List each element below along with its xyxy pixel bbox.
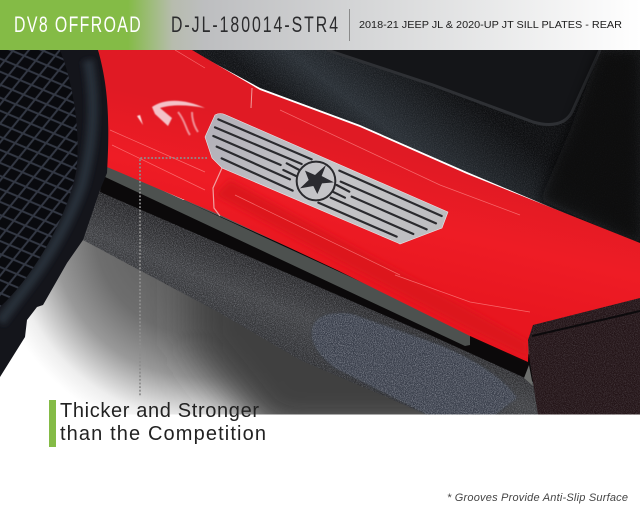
part number: D-JL-180014-STR4 <box>171 14 338 38</box>
highlight lines <box>110 50 530 312</box>
headline: than the Competition <box>60 423 266 445</box>
red body panel <box>98 50 640 362</box>
footnote: * Grooves Provide Anti-Slip Surface <box>447 492 628 504</box>
panel fold <box>213 168 222 216</box>
darker red shading <box>215 180 528 358</box>
step corner bracket <box>524 365 533 386</box>
product title: 2018-21 JEEP JL & 2020-UP JT SILL PLATES - REAR <box>359 19 622 31</box>
stainless sill plate <box>205 114 448 244</box>
mesh grille <box>0 50 78 307</box>
floor shadow fading to white <box>26 200 530 414</box>
grey lower body strip <box>103 164 470 346</box>
step pad <box>312 313 517 415</box>
carpet mat <box>327 50 600 125</box>
divider <box>349 9 350 41</box>
shadow gap under body <box>100 165 540 385</box>
wheel flare right <box>528 298 640 415</box>
headline: Thicker and Stronger <box>60 400 259 422</box>
left mud flap <box>0 50 108 377</box>
photo: sill plate on red Jeep <box>26 50 640 414</box>
headline <box>60 400 266 445</box>
star emblem <box>297 162 335 200</box>
side step tube <box>83 170 545 415</box>
interior sill and carpet <box>190 50 640 245</box>
flap blue edge band <box>0 60 93 322</box>
specular reflection <box>137 101 205 135</box>
header bar <box>0 0 640 50</box>
dotted callout line <box>140 158 207 397</box>
green accent bar <box>49 400 56 447</box>
plate grooves <box>213 119 442 237</box>
brand: DV8 OFFROAD <box>14 14 141 38</box>
